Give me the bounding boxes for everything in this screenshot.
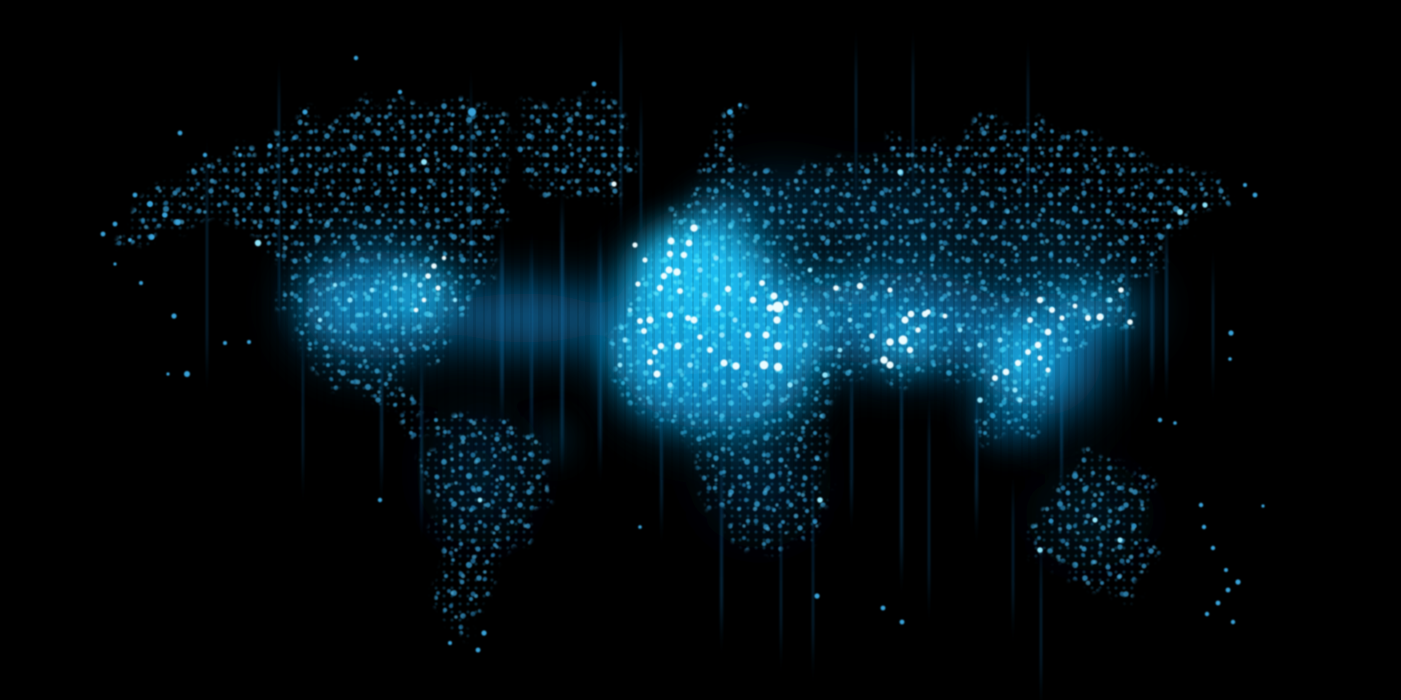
infographic: glowing world map xyxy=(100,38,1266,692)
bright white city dots xyxy=(414,181,1133,381)
mid-tone accent dots xyxy=(255,159,1208,553)
third dot layer xyxy=(116,95,1231,630)
vertical light streaks xyxy=(206,50,1214,680)
dot grid xyxy=(114,90,1230,638)
vertical banding over glow xyxy=(250,180,1170,480)
glow: wide equatorial haze xyxy=(300,181,1145,550)
East Asia cluster xyxy=(992,287,1133,381)
glow: bright cores xyxy=(305,195,1125,456)
scattered large dots xyxy=(114,96,1232,636)
outlying island dots xyxy=(101,56,1265,652)
Europe and Africa cluster xyxy=(611,181,789,378)
Middle East and South Asia cluster xyxy=(833,283,947,369)
scattered small dots xyxy=(118,90,1226,642)
North America cluster xyxy=(414,256,446,312)
continents: dot field xyxy=(114,90,1232,642)
